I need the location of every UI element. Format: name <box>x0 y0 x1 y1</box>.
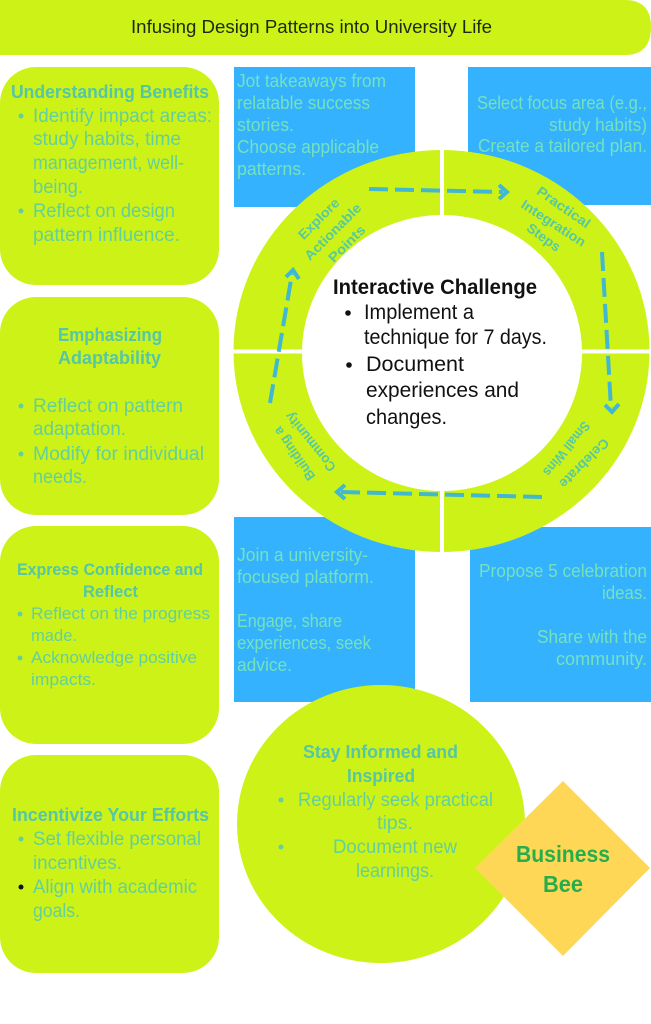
ring label: practical integration steps <box>518 183 593 255</box>
arrow: left dashed <box>270 270 299 403</box>
panel: emphasizing adaptability: needs. <box>33 467 87 488</box>
panel: blue box top left <box>234 67 415 207</box>
panel: understanding benefits: being. <box>33 177 83 198</box>
ring label: building a community: Building a <box>270 424 318 483</box>
center text: interactive challenge: experiences and <box>366 379 519 402</box>
panel: understanding benefits <box>0 67 219 285</box>
panel: blue box bottom right: Propose 5 celebration <box>479 561 647 581</box>
panel: blue box bottom left: Join a university- <box>237 545 368 565</box>
panel: blue box bottom left <box>234 517 415 702</box>
panel: incentivize your efforts: incentives. <box>33 853 122 874</box>
ring label: explore actionable points: Explore <box>295 195 343 243</box>
ring label: practical integration steps: Practical <box>534 183 593 231</box>
center text: interactive challenge: Document <box>366 353 464 376</box>
panel: understanding benefits: Reflect on design <box>33 201 175 222</box>
ring label: celebrate small wins: Small Wins <box>540 418 593 479</box>
panel: emphasizing adaptability: Adaptability <box>58 348 161 368</box>
panel: blue box bottom left: Engage, share <box>237 611 342 631</box>
arrow: top dashed <box>369 185 507 199</box>
panel: incentivize your efforts: Incentivize Your Efforts <box>12 805 209 825</box>
panel: blue box bottom left: experiences, seek <box>237 633 372 653</box>
panel: stay informed and inspired: Regularly seek practical <box>298 790 493 811</box>
panel: express confidence and reflect <box>0 526 219 744</box>
logo: business bee diamond <box>475 781 650 956</box>
panel: blue box bottom right <box>470 527 651 702</box>
panel: understanding benefits: study habits, time <box>33 129 181 150</box>
panel: stay informed and inspired: tips. <box>377 813 413 834</box>
panel: blue box top right: Create a tailored plan. <box>478 136 647 156</box>
center text: interactive challenge: changes. <box>366 406 447 429</box>
panel: incentivize your efforts: goals. <box>33 901 80 922</box>
panel: express confidence and reflect: Express Confidence and <box>17 560 203 579</box>
panel: express confidence and reflect: Acknowledge positive <box>31 648 197 667</box>
panel: blue box bottom left: advice. <box>237 655 292 675</box>
ring label: explore actionable points: Actionable <box>301 200 365 263</box>
panel: emphasizing adaptability <box>0 297 219 515</box>
panel: blue box top left: Jot takeaways from <box>237 71 386 91</box>
panel: stay informed and inspired: Inspired <box>347 766 415 786</box>
panel: blue box bottom right: ideas. <box>602 583 647 603</box>
panel: stay informed and inspired: learnings. <box>356 861 434 882</box>
panel: understanding benefits: Understanding Benefits <box>11 82 209 102</box>
ring label: practical integration steps: Integration <box>518 197 589 250</box>
panel: blue box top left: stories. <box>237 115 294 135</box>
panel: emphasizing adaptability: Emphasizing <box>58 325 162 345</box>
logo: business bee diamond: Business <box>516 841 610 867</box>
panel: blue box top left: relatable success <box>237 93 370 113</box>
ring label: explore actionable points: Points <box>325 222 368 265</box>
panel: understanding benefits: pattern influence. <box>33 225 180 246</box>
panel: blue box bottom right: Share with the <box>537 627 647 647</box>
ring label: celebrate small wins: Celebrate <box>556 435 612 491</box>
panel: stay informed and inspired: Stay Informed and <box>303 742 458 762</box>
center text: interactive challenge: Interactive Challenge <box>333 276 537 299</box>
panel: incentivize your efforts: Set flexible personal <box>33 829 201 850</box>
panel: blue box top right: study habits) <box>549 115 647 135</box>
center text: interactive challenge <box>333 276 547 429</box>
panel: stay informed and inspired <box>237 685 525 963</box>
logo: business bee diamond: Bee <box>543 871 583 897</box>
panel: blue box top right <box>468 67 651 205</box>
center text: interactive challenge: Implement a <box>364 301 474 324</box>
cycle ring diagram <box>232 148 651 554</box>
panel: blue box top left: Choose applicable <box>237 137 379 157</box>
panel: stay informed and inspired: Document new <box>333 837 457 858</box>
panel: blue box bottom left: focused platform. <box>237 567 374 587</box>
panel: blue box top left: patterns. <box>237 159 306 179</box>
panel: emphasizing adaptability: adaptation. <box>33 419 126 440</box>
title banner <box>0 0 651 55</box>
center text: interactive challenge: technique for 7 days. <box>364 326 547 349</box>
ring label: building a community: Community <box>282 409 339 475</box>
panel: express confidence and reflect: Reflect <box>83 582 138 601</box>
panel: express confidence and reflect: made. <box>31 626 77 645</box>
ring label: explore actionable points <box>295 195 368 265</box>
panel: emphasizing adaptability: Modify for individual <box>33 444 204 465</box>
panel: understanding benefits: Identify impact areas: <box>33 106 212 127</box>
panel: emphasizing adaptability: Reflect on pattern <box>33 396 183 417</box>
panel: express confidence and reflect: impacts. <box>31 670 96 689</box>
ring label: celebrate small wins <box>540 418 612 491</box>
panel: understanding benefits: management, well- <box>33 153 184 174</box>
arrow: right dashed <box>602 252 619 412</box>
panel: blue box bottom right: community. <box>556 649 647 669</box>
panel: express confidence and reflect: Reflect on the progress <box>31 604 210 623</box>
panel: incentivize your efforts: Align with academic <box>33 877 197 898</box>
panel: incentivize your efforts <box>0 755 219 973</box>
title banner: Infusing Design Patterns into University Life <box>131 17 492 37</box>
ring label: practical integration steps: Steps <box>524 220 563 255</box>
arrow: bottom dashed <box>337 485 542 499</box>
